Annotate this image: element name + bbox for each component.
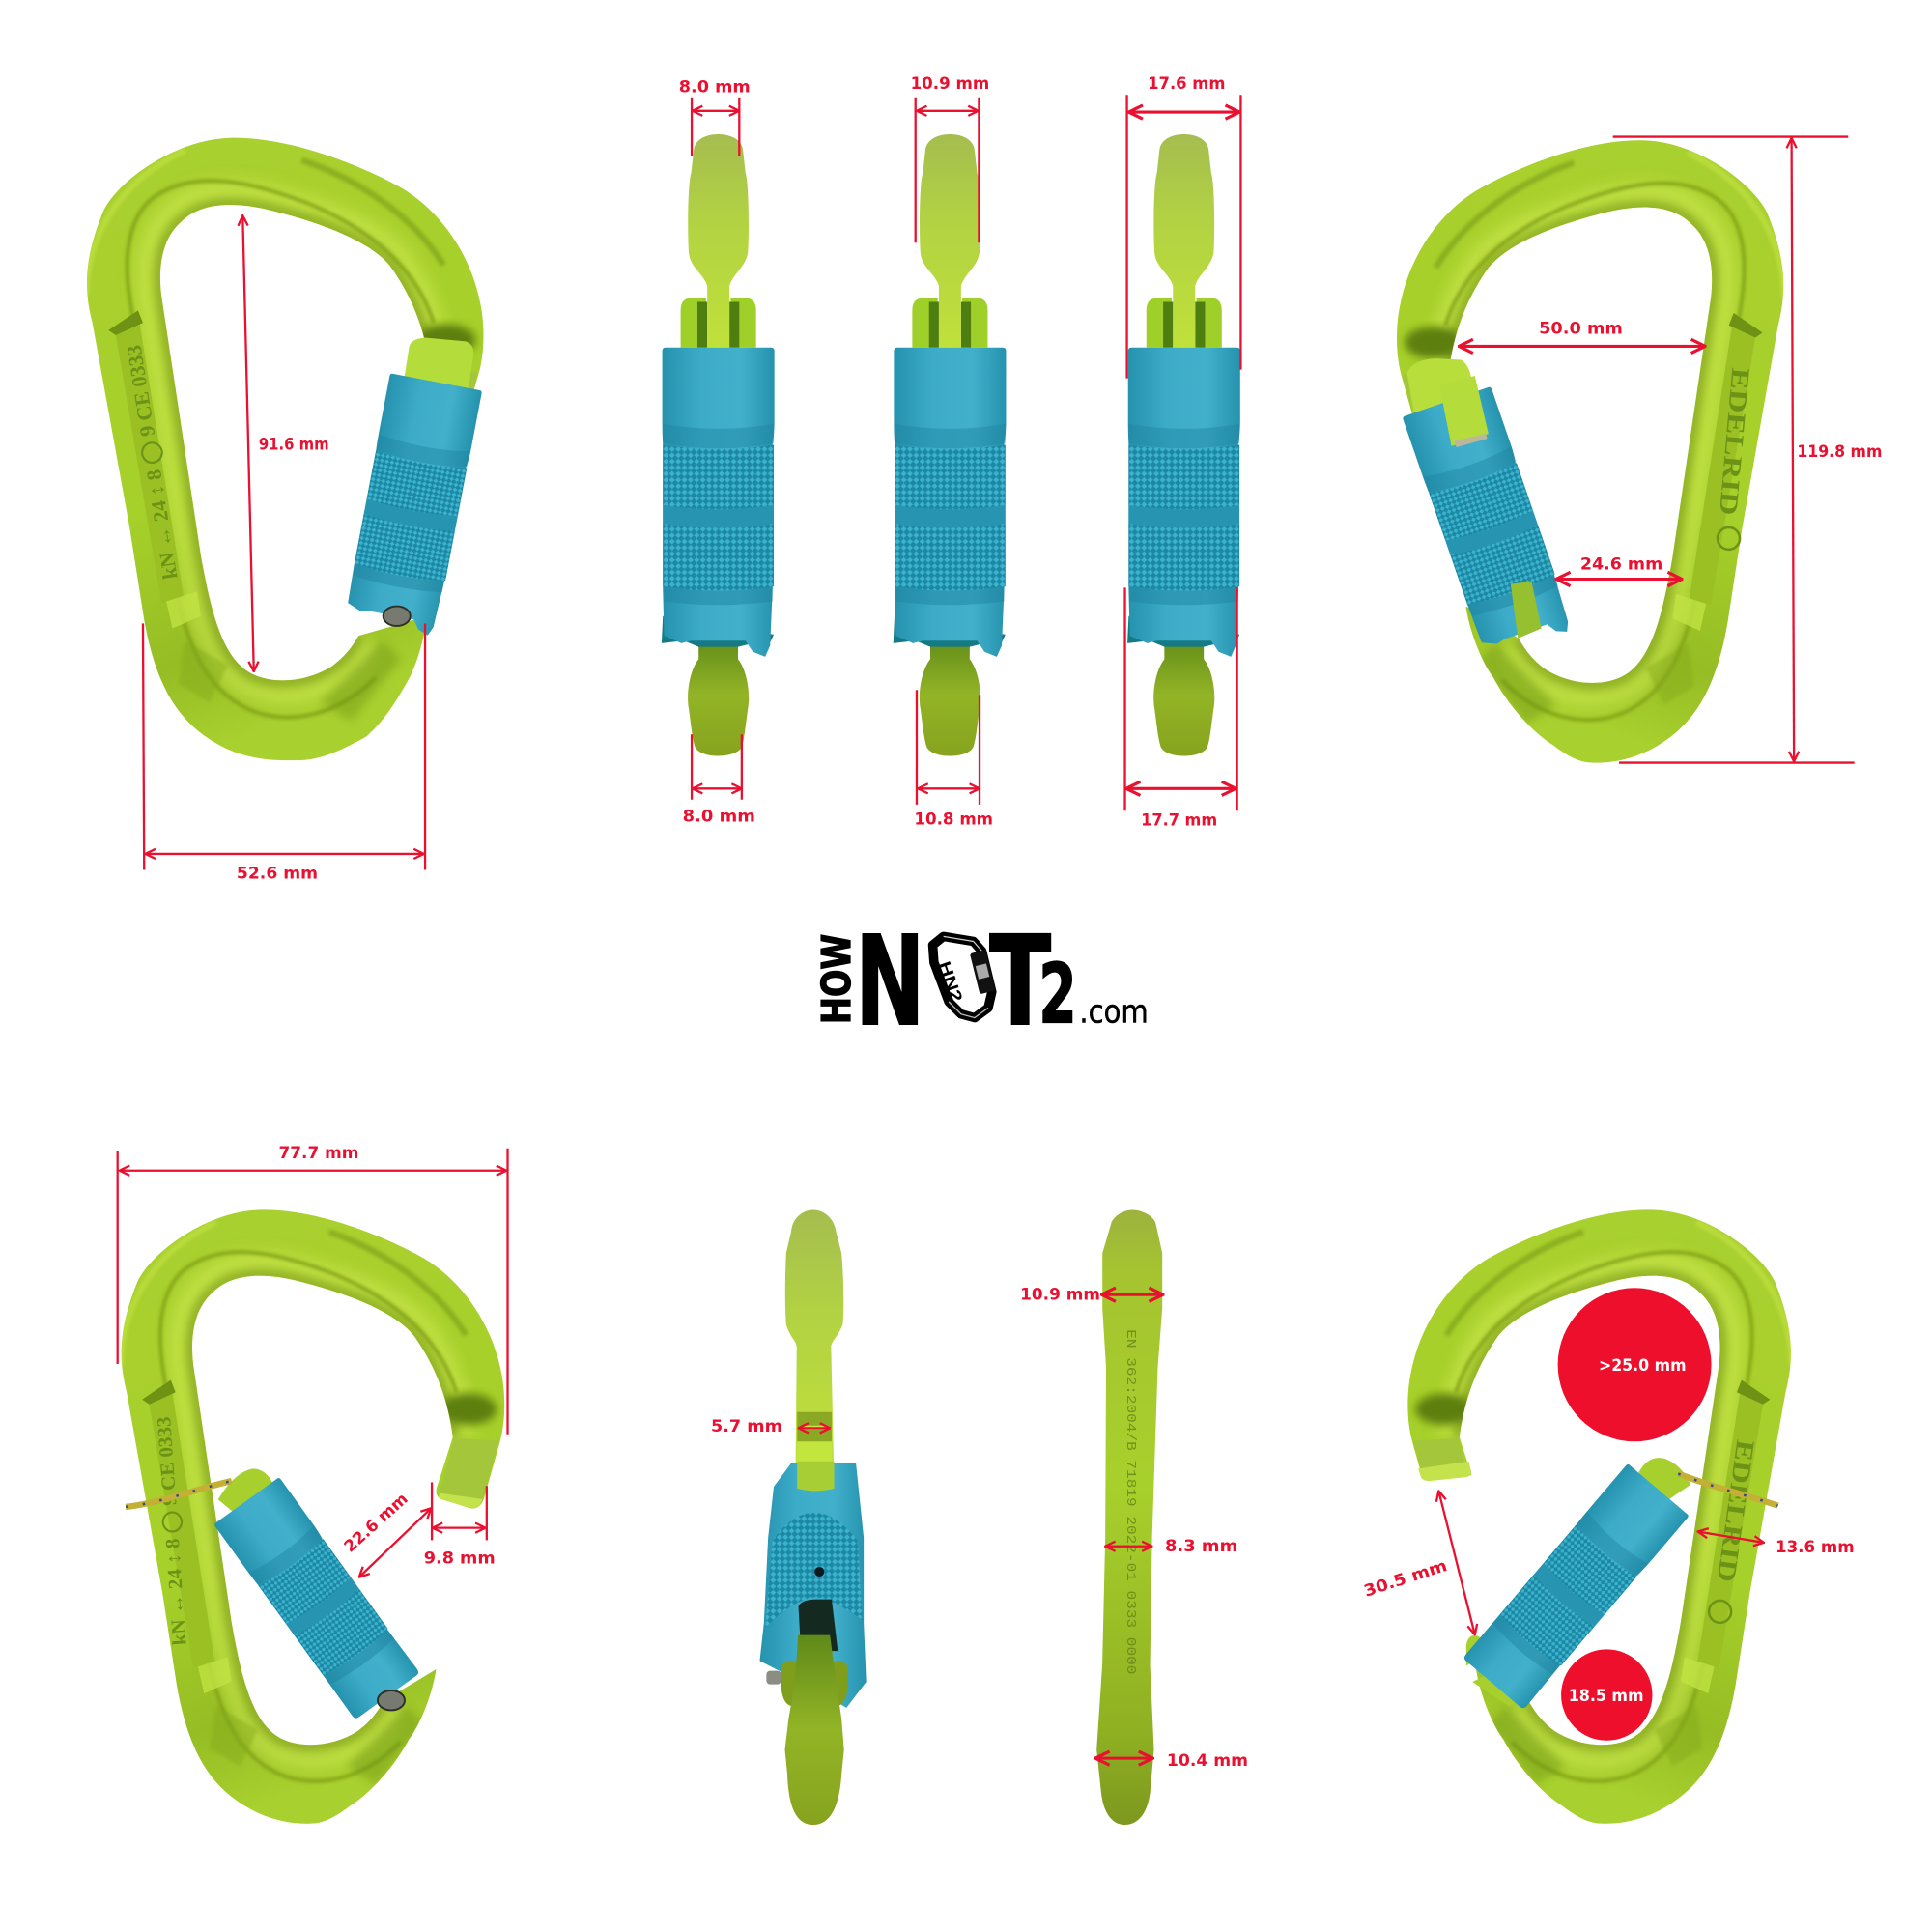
nose width dimension: 9.8 mm <box>424 1549 496 1568</box>
top width dimension: 10.9 mm <box>1020 1286 1100 1304</box>
logo letter T: T <box>989 911 1051 1054</box>
logo carabiner replacing O: HN2 <box>935 959 966 1005</box>
overall length dimension: 119.8 mm <box>1797 442 1882 461</box>
gate opening dimension: 50.0 mm <box>1539 320 1623 338</box>
bottom width dimension <box>683 734 755 826</box>
gate sleeve pushed open <box>1463 1463 1690 1710</box>
side view 2: 10.9 mm widths <box>894 74 1006 828</box>
inside length dimension <box>242 215 329 671</box>
carabiner body <box>1407 1209 1792 1824</box>
gate plunger <box>1638 1458 1690 1503</box>
carabiner body <box>1397 140 1784 763</box>
logo carabiner replacing O <box>933 936 995 1018</box>
small opening circle: 18.5 mm <box>1569 1687 1644 1705</box>
gate lower lug <box>1466 1635 1528 1707</box>
bottom width dimension: 10.4 mm <box>1167 1751 1248 1770</box>
upper sleeve slot <box>797 1462 835 1491</box>
sleeve hole <box>814 1567 824 1577</box>
carabiner side view <box>1127 134 1240 756</box>
gate plunger <box>218 1468 273 1518</box>
top width dimension: 10.9 mm <box>911 74 989 93</box>
sleeve <box>759 1463 867 1708</box>
gate clearance dimension: 22.6 mm <box>340 1490 412 1556</box>
embossed rating text: kN ↔ 24 ↕ 8 ◯ 9 CE 0333 <box>123 343 184 581</box>
gate opening dimension <box>1362 1491 1475 1634</box>
bottom width dimension: 17.7 mm <box>1141 811 1217 830</box>
bottom width dimension: 8.0 mm <box>683 808 755 826</box>
nose rim <box>1418 1462 1471 1481</box>
overall width dimension: 77.7 mm <box>279 1144 358 1162</box>
embossed rating text: kN ↔ 24 ↕ 8 ◯ 9 CE 0333 <box>154 1416 192 1646</box>
carabiner side view <box>662 134 775 756</box>
gate pin <box>378 1690 405 1710</box>
logo domain suffix: .com <box>1079 992 1149 1030</box>
side view 1: 8.0 mm widths <box>662 78 775 826</box>
carabiner spine <box>785 1210 843 1466</box>
carabiner body <box>86 138 483 760</box>
gate plunger <box>402 337 473 407</box>
large opening circle <box>1558 1288 1712 1441</box>
gate opening dimension: 30.5 mm <box>1362 1556 1449 1601</box>
side view 3: 17.6 mm widths <box>1125 74 1240 830</box>
gate sleeve <box>343 373 482 637</box>
carabiner: bottom-left open gate view <box>118 1144 508 1824</box>
carabiner: bottom-right open gate view <box>1362 1209 1855 1824</box>
spine width dimension: 13.6 mm <box>1776 1538 1855 1556</box>
inside length dimension: 91.6 mm <box>259 436 329 454</box>
mid width dimension: 8.3 mm <box>1165 1537 1237 1555</box>
logo letter N: N <box>855 911 924 1054</box>
basket width dimension <box>1556 554 1682 579</box>
upper slot in sleeve <box>1439 376 1489 447</box>
nose width dimension <box>424 1482 496 1568</box>
top width dimension: 17.6 mm <box>1148 74 1225 93</box>
logo word HOW: HOW <box>813 934 860 1024</box>
spine width dimension <box>1698 1531 1855 1556</box>
carabiner body <box>121 1209 504 1824</box>
mid width dimension <box>1105 1537 1237 1555</box>
bottom width dimension: 10.8 mm <box>914 810 993 828</box>
gate pin <box>384 607 411 626</box>
white trim shortening the nose <box>1403 1475 1484 1521</box>
narrow view: spine with standards text <box>1020 1210 1248 1825</box>
small opening circle <box>1561 1649 1652 1741</box>
embossed H mark <box>1709 1601 1731 1623</box>
carabiner: top-right closed view with dimensions <box>1397 137 1882 763</box>
gate clearance dimension <box>340 1490 431 1577</box>
embossed H mark <box>1718 527 1740 550</box>
gate sleeve <box>1403 386 1575 660</box>
logo: HowNOT2.com <box>813 911 1149 1054</box>
lower slot in sleeve <box>1511 582 1542 639</box>
spine body <box>1096 1210 1162 1825</box>
nose width dimension <box>711 1417 830 1435</box>
narrow view: gate end with 5.7 mm nose <box>711 1210 867 1825</box>
nose slot <box>797 1412 832 1462</box>
tie cord <box>1678 1474 1778 1506</box>
tie cord <box>126 1481 232 1507</box>
lower sleeve opening <box>799 1600 838 1651</box>
standards text: EN 362:2004/B 71819 2022-01 0333 0000 <box>1122 1329 1138 1674</box>
sleeve knurl <box>765 1513 863 1629</box>
embossed brand text: EDELRID <box>1712 1438 1760 1584</box>
carabiner: top-left closed view with dimensions <box>86 138 483 882</box>
spine lower end <box>784 1635 844 1825</box>
spine lower lugs <box>781 1661 848 1706</box>
width dimension: 52.6 mm <box>237 864 318 882</box>
logo numeral 2: 2 <box>1038 948 1077 1043</box>
pin <box>766 1671 781 1685</box>
embossed brand text: EDELRID <box>1714 367 1755 517</box>
carabiner side view <box>894 134 1006 756</box>
nose width dimension: 5.7 mm <box>711 1417 782 1435</box>
basket width dimension: 24.6 mm <box>1580 554 1662 573</box>
top width dimension <box>679 78 751 156</box>
large opening circle: >25.0 mm <box>1599 1356 1687 1375</box>
top width dimension: 8.0 mm <box>679 78 751 97</box>
gate sleeve pushed open <box>213 1477 420 1720</box>
gate plunger <box>1407 358 1479 431</box>
